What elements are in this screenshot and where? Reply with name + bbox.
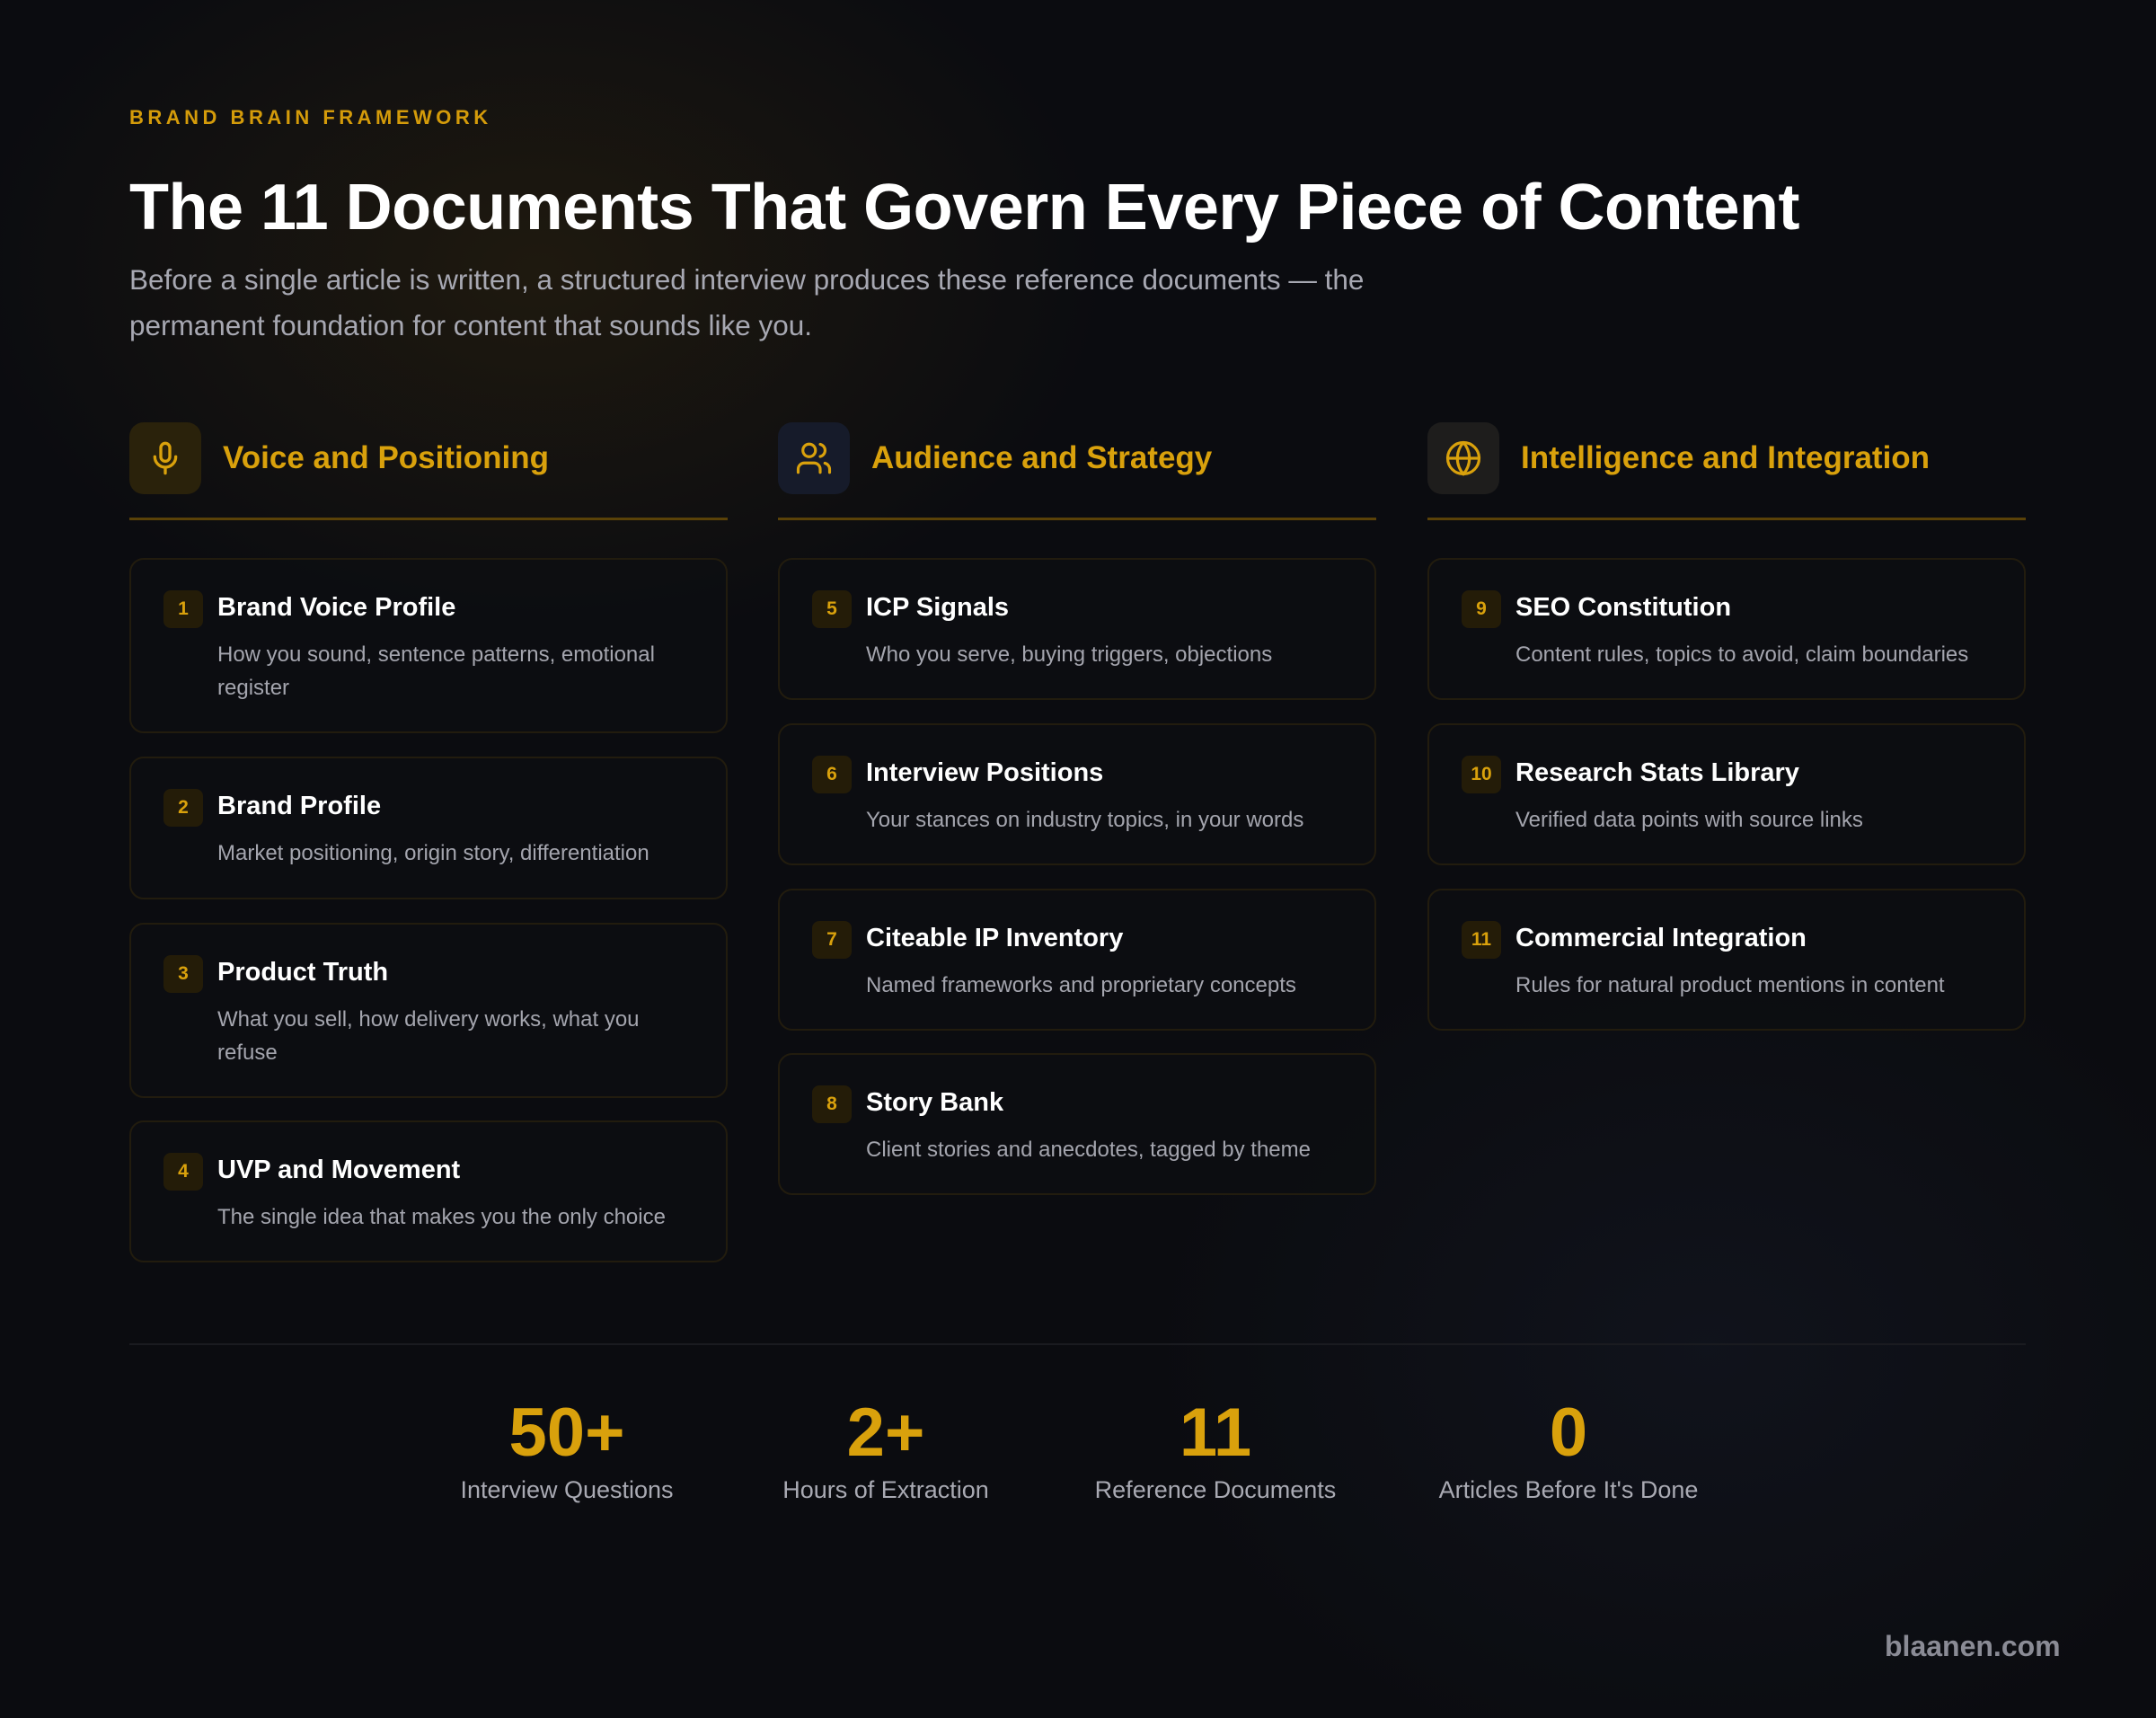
heading: intelligence and integration: Intelligence and Integration (1521, 440, 1930, 475)
title: The 11 Documents That Govern Every Piece of Content (129, 172, 1799, 244)
stat: 2+: 2+ (847, 1395, 924, 1471)
stat: 2+ (782, 1395, 989, 1503)
icon: people (778, 422, 850, 494)
panel: audience and strategy (778, 422, 1376, 1195)
card 5: ICP Signals (866, 593, 1009, 622)
card 10: Verified data points with source links (1515, 808, 1863, 832)
card 1 (129, 558, 728, 733)
stat: 0 (1439, 1395, 1698, 1503)
card 4: The single idea that makes you the only choice (217, 1205, 666, 1229)
stat: 50+: Interview Questions (460, 1476, 674, 1503)
panel: intelligence and integration (1427, 422, 2026, 1031)
card 9: SEO Constitution (1515, 593, 1731, 622)
card 9: Content rules, topics to avoid, claim boundaries (1515, 642, 1968, 667)
card 4: 4 (178, 1161, 189, 1182)
stat: 11 (1095, 1395, 1336, 1503)
panel: voice and positioning (129, 422, 728, 1262)
card 11: Commercial Integration (1515, 924, 1807, 952)
card 10: 10 (1471, 764, 1492, 784)
card 4: UVP and Movement (217, 1156, 460, 1184)
card 8 (778, 1053, 1376, 1195)
card 11 (1427, 889, 2026, 1031)
card 11: 11 (1471, 929, 1491, 950)
card 8: Story Bank (866, 1088, 1003, 1117)
icon: globe (1427, 422, 1499, 494)
card 3: Product Truth (217, 958, 388, 987)
card 1: Brand Voice Profile (217, 593, 455, 622)
card 7: Citeable IP Inventory (866, 924, 1123, 952)
card 3: 3 (178, 963, 189, 984)
subtitle: Before a single article is written, a structured interview produces these reference documents — the permanent foundation for content that sounds like you. (129, 263, 1364, 341)
stat: 11: 11 (1180, 1395, 1251, 1471)
card 2: Market positioning, origin story, differentiation (217, 841, 649, 865)
card 2: Brand Profile (217, 792, 381, 820)
card 2 (129, 757, 728, 899)
card 11: Rules for natural product mentions in content (1515, 973, 1945, 997)
stat: 0: Articles Before It's Done (1439, 1476, 1698, 1503)
card 7: Named frameworks and proprietary concepts (866, 973, 1296, 997)
card 6 (778, 723, 1376, 865)
card 5: Who you serve, buying triggers, objections (866, 642, 1272, 667)
card 8: 8 (826, 1094, 837, 1114)
card 6: Your stances on industry topics, in your words (866, 808, 1303, 832)
heading: audience and strategy: Audience and Strategy (871, 440, 1212, 475)
card 9: 9 (1476, 598, 1487, 619)
card 8: Client stories and anecdotes, tagged by theme (866, 1138, 1311, 1162)
kicker label: BRAND BRAIN FRAMEWORK (129, 106, 492, 128)
card 7 (778, 889, 1376, 1031)
stat: 2+: Hours of Extraction (782, 1476, 989, 1503)
card 5 (778, 558, 1376, 700)
heading: intelligence and integration (1427, 422, 1930, 494)
card 7: 7 (826, 929, 837, 950)
card 1: 1 (178, 598, 189, 619)
card 9 (1427, 558, 2026, 700)
card 5: 5 (826, 598, 837, 619)
card 10: Research Stats Library (1515, 758, 1799, 787)
card 3 (129, 923, 728, 1098)
card 6: 6 (826, 764, 837, 784)
heading: voice and positioning: Voice and Positioning (223, 440, 549, 475)
card 4 (129, 1120, 728, 1262)
card 10 (1427, 723, 2026, 865)
icon: microphone (129, 422, 201, 494)
stat: 50+ (460, 1395, 674, 1503)
footer brand: blaanen.com (1885, 1630, 2061, 1662)
card 1: How you sound, sentence patterns, emotional register (217, 642, 655, 700)
heading: audience and strategy (778, 422, 1212, 494)
stat: 11: Reference Documents (1095, 1476, 1336, 1503)
stat: 50+: 50+ (509, 1395, 624, 1471)
heading: voice and positioning (129, 422, 549, 494)
card 3: What you sell, how delivery works, what you refuse (217, 1007, 640, 1065)
card 6: Interview Positions (866, 758, 1103, 787)
card 2: 2 (178, 797, 189, 818)
stat: 0: 0 (1550, 1395, 1587, 1471)
stats row (460, 1395, 1698, 1503)
